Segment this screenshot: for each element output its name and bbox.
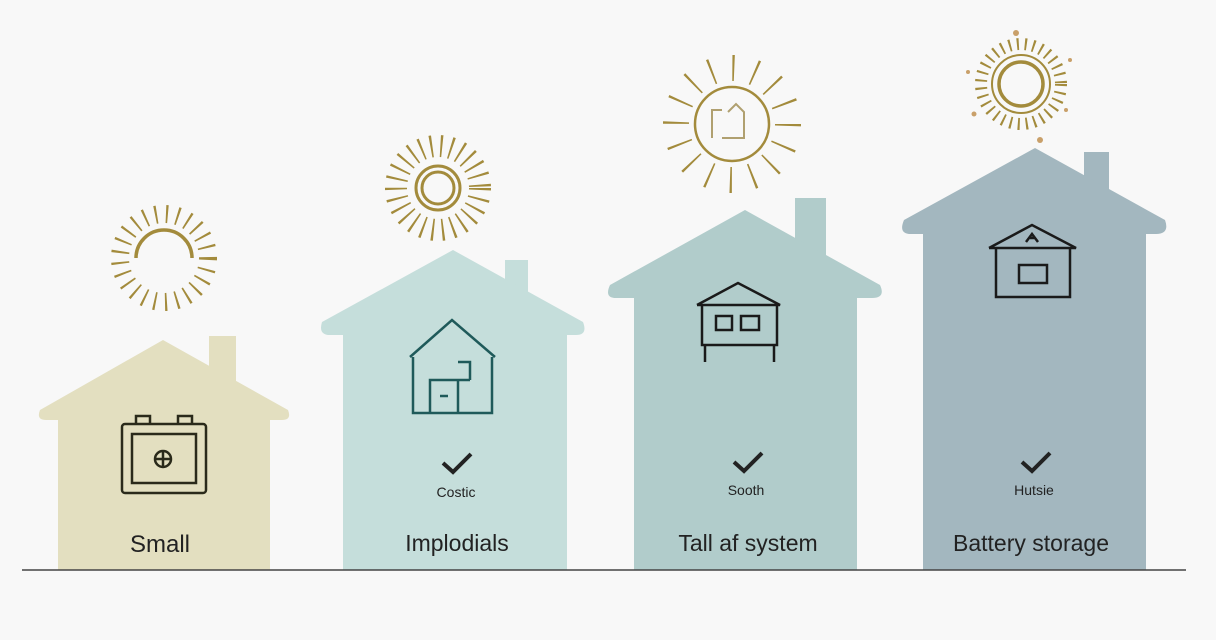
label: Battery storage <box>953 530 1109 556</box>
house 3: Tall af system <box>608 198 882 570</box>
check + Hutsie <box>1014 453 1054 498</box>
label: Implodials: Implodials <box>405 530 509 556</box>
icon: stilt house <box>697 283 780 362</box>
icon: battery <box>122 416 206 493</box>
sun 3 <box>676 68 788 180</box>
check + Sooth: Sooth <box>728 482 764 498</box>
baseline <box>22 569 1186 571</box>
check + Hutsie: Hutsie <box>1014 482 1054 498</box>
check + Costic <box>437 454 475 500</box>
house 2: Implodials <box>321 250 584 570</box>
house 1: Small <box>39 336 289 570</box>
icon: house outline <box>410 320 495 413</box>
sun 2 <box>396 146 480 230</box>
label: Small: Small <box>130 531 190 558</box>
icon: storage building <box>989 225 1076 297</box>
sun 4 <box>966 30 1072 143</box>
label: Tall af system <box>678 530 818 556</box>
check + Costic: Costic <box>437 484 475 500</box>
house 4: Battery storage <box>902 148 1166 570</box>
sun 1 <box>120 214 208 302</box>
check + Sooth <box>728 453 764 498</box>
